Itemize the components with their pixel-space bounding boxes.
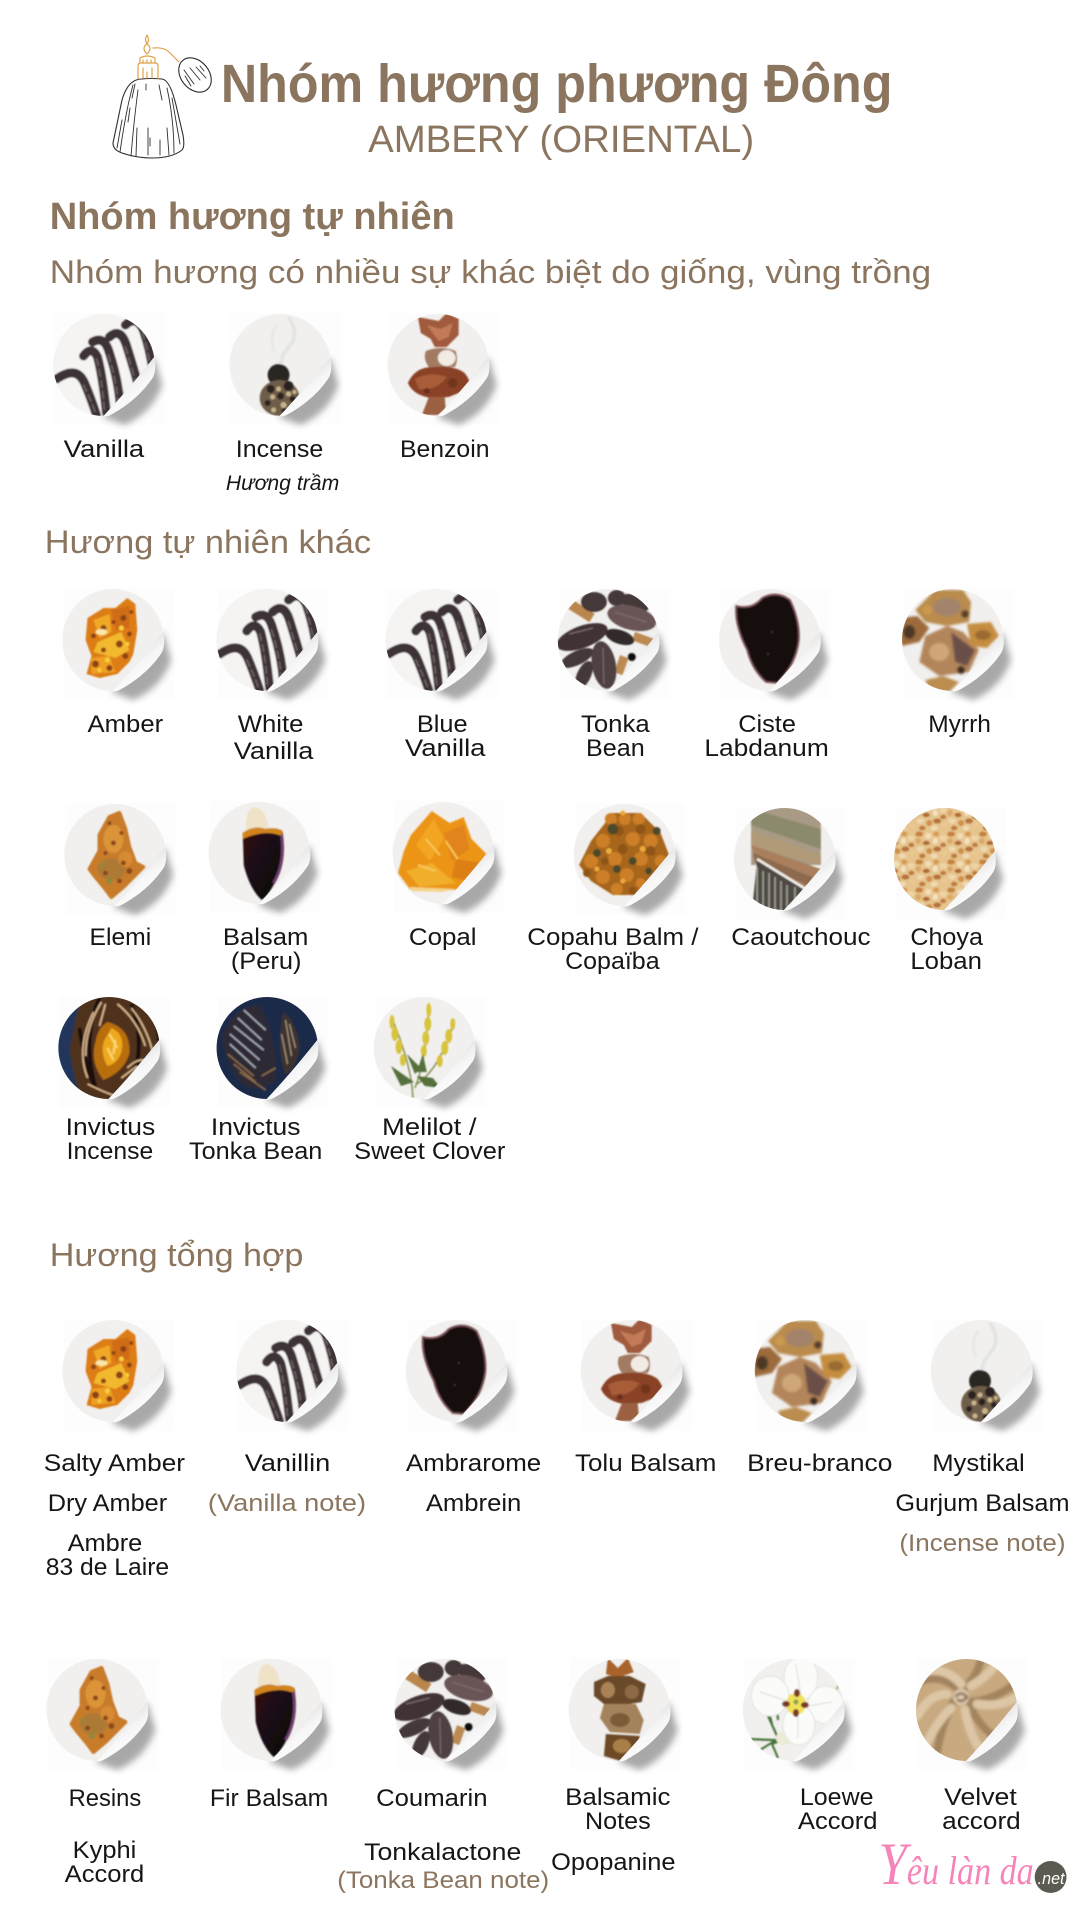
label: Balsamic Notes, Opopanine: Balsamic [565, 1784, 671, 1811]
item: Invictus Tonka Bean sticker [216, 994, 328, 1108]
heading: other natural scents: Hương tự nhiên khác [45, 524, 371, 560]
label: Ambrarome, Ambrein: Ambrarome [406, 1450, 541, 1477]
label: Coumarin, Tonkalactone: Tonkalactone [364, 1839, 521, 1866]
label: Velvet accord: accord [942, 1808, 1021, 1835]
label: Salty Amber group: 83 de Laire [46, 1554, 169, 1581]
item: Salty Amber sticker [62, 1319, 174, 1431]
item: Invictus Incense sticker [58, 994, 170, 1108]
item: Mystikal sticker [931, 1319, 1043, 1431]
label: Resins, Kyphi Accord: Resins [69, 1785, 141, 1812]
item: Copal sticker [393, 801, 504, 913]
label: Coumarin, Tonkalactone: Coumarin [376, 1785, 488, 1812]
label: Blue Vanilla: Vanilla [405, 735, 486, 762]
label: Breu-branco: Breu-branco [747, 1450, 892, 1477]
note: Incense note: (Incense note) [899, 1530, 1066, 1557]
item: Elemi sticker [64, 803, 176, 915]
item: Ciste Labdanum sticker [719, 588, 831, 700]
label: Elemi: Elemi [90, 924, 151, 951]
item: Loewe Accord sticker [743, 1656, 855, 1770]
panel: other natural scents grid [58, 588, 1014, 1165]
label: Melilot / Sweet Clover: Sweet Clover [354, 1138, 505, 1165]
item: Resins sticker [46, 1658, 158, 1770]
label: Ciste Labdanum: Labdanum [704, 735, 829, 762]
label: Resins, Kyphi Accord: Kyphi [73, 1837, 136, 1864]
label: White Vanilla: Vanilla [234, 738, 314, 765]
item: Tonka Bean sticker [553, 588, 670, 700]
label: Caoutchouc: Caoutchouc [731, 924, 871, 951]
heading: synthetic scents: Hương tổng hợp [50, 1237, 303, 1273]
label: Copahu Balm / Copaïba: Copahu Balm / [527, 924, 699, 951]
item: Ambrarome sticker [406, 1319, 517, 1431]
label: Copal: Copal [409, 924, 477, 951]
label: Benzoin: Benzoin [400, 436, 489, 463]
label: Invictus Tonka Bean: Invictus [211, 1114, 300, 1141]
label: Melilot / Sweet Clover: Melilot / [382, 1114, 477, 1141]
label: Balsam Peru: (Peru) [231, 948, 301, 975]
item: Breu-branco sticker [752, 1319, 867, 1431]
note: Vanilla note: (Vanilla note) [208, 1490, 366, 1517]
item: Velvet accord sticker [915, 1656, 1028, 1770]
label: Incense Vietnamese name: Hương trầm [226, 472, 339, 495]
label: Invictus Incense: Incense [67, 1138, 153, 1165]
item: Incense sticker [229, 313, 341, 425]
icon: perfume atomizer bottle [113, 35, 218, 158]
item: Benzoin sticker [388, 313, 499, 425]
label: Choya Loban: Choya [910, 924, 984, 951]
label: Vanillin: Vanillin [245, 1450, 330, 1477]
label: Loewe Accord: Accord [798, 1808, 878, 1835]
item: Caoutchouc sticker [734, 805, 846, 919]
label: Invictus Incense: Invictus [66, 1114, 155, 1141]
note: Tonka Bean note: (Tonka Bean note) [337, 1867, 549, 1894]
label: Fir Balsam: Fir Balsam [210, 1785, 328, 1812]
label: Amber: Amber [88, 711, 163, 738]
label: Invictus Tonka Bean: Tonka Bean [189, 1138, 322, 1165]
label: Choya Loban: Loban [910, 948, 982, 975]
item: Myrrh sticker [899, 588, 1014, 700]
item: Balsamic Notes sticker [569, 1658, 681, 1770]
label: Ciste Labdanum: Ciste [738, 711, 796, 738]
item: Amber sticker [62, 588, 174, 700]
label: Balsamic Notes, Opopanine: Notes [585, 1808, 651, 1835]
label: Copahu Balm / Copaïba: Copaïba [565, 948, 660, 975]
label: Mystikal, Gurjum Balsam: Mystikal [932, 1450, 1025, 1477]
item: Blue Vanilla sticker [386, 588, 497, 700]
label: Salty Amber group: Salty Amber [44, 1450, 185, 1477]
item: Choya Loban sticker [893, 805, 1006, 919]
item: Melilot sticker [374, 996, 486, 1108]
panel: natural scents row [53, 313, 499, 495]
label: Myrrh: Myrrh [928, 711, 991, 738]
label: Blue Vanilla: Blue [417, 711, 468, 738]
label: Mystikal, Gurjum Balsam: Gurjum Balsam [895, 1490, 1070, 1517]
label: Incense: Incense [236, 436, 323, 463]
item: Vanilla sticker [53, 313, 165, 425]
item: Balsam Peru sticker [209, 801, 320, 913]
label: Ambrarome, Ambrein: Ambrein [426, 1490, 521, 1517]
item: Copahu Balm sticker [574, 803, 685, 915]
label: Velvet accord: Velvet [944, 1784, 1017, 1811]
label: White Vanilla: White [238, 711, 303, 738]
item: White Vanilla sticker [217, 588, 328, 700]
logo: Yêu làn da .net: .net [1038, 1869, 1066, 1888]
logo: Yêu làn da .net: Yêu làn da [878, 1831, 1034, 1897]
item: Coumarin sticker [390, 1658, 506, 1770]
label: Tonka Bean: Bean [586, 735, 645, 762]
label: Salty Amber group: Dry Amber [48, 1490, 167, 1517]
label: Tolu Balsam: Tolu Balsam [575, 1450, 716, 1477]
item: Tolu Balsam sticker [581, 1319, 692, 1431]
label: Tonka Bean: Tonka [581, 711, 650, 738]
label: Balsam Peru: Balsam [223, 924, 308, 951]
label: Balsamic Notes, Opopanine: Opopanine [551, 1849, 676, 1876]
item: Vanillin sticker [236, 1319, 348, 1431]
panel: synthetic scents grid [44, 1319, 1070, 1894]
label: Loewe Accord: Loewe [800, 1784, 874, 1811]
subtitle: AMBERY (ORIENTAL) [368, 119, 754, 161]
item: Fir Balsam sticker [221, 1658, 332, 1770]
heading: natural scents: Nhóm hương tự nhiên [50, 196, 455, 238]
label: Resins, Kyphi Accord: Accord [65, 1861, 144, 1888]
subheading: natural scents description: Nhóm hương có nhiều sự khác biệt do giống, vùng trồng [50, 254, 931, 290]
title: Nhóm hương phương Đông [221, 54, 892, 114]
label: Salty Amber group: Ambre [68, 1530, 142, 1557]
label: Vanilla: Vanilla [64, 436, 145, 463]
